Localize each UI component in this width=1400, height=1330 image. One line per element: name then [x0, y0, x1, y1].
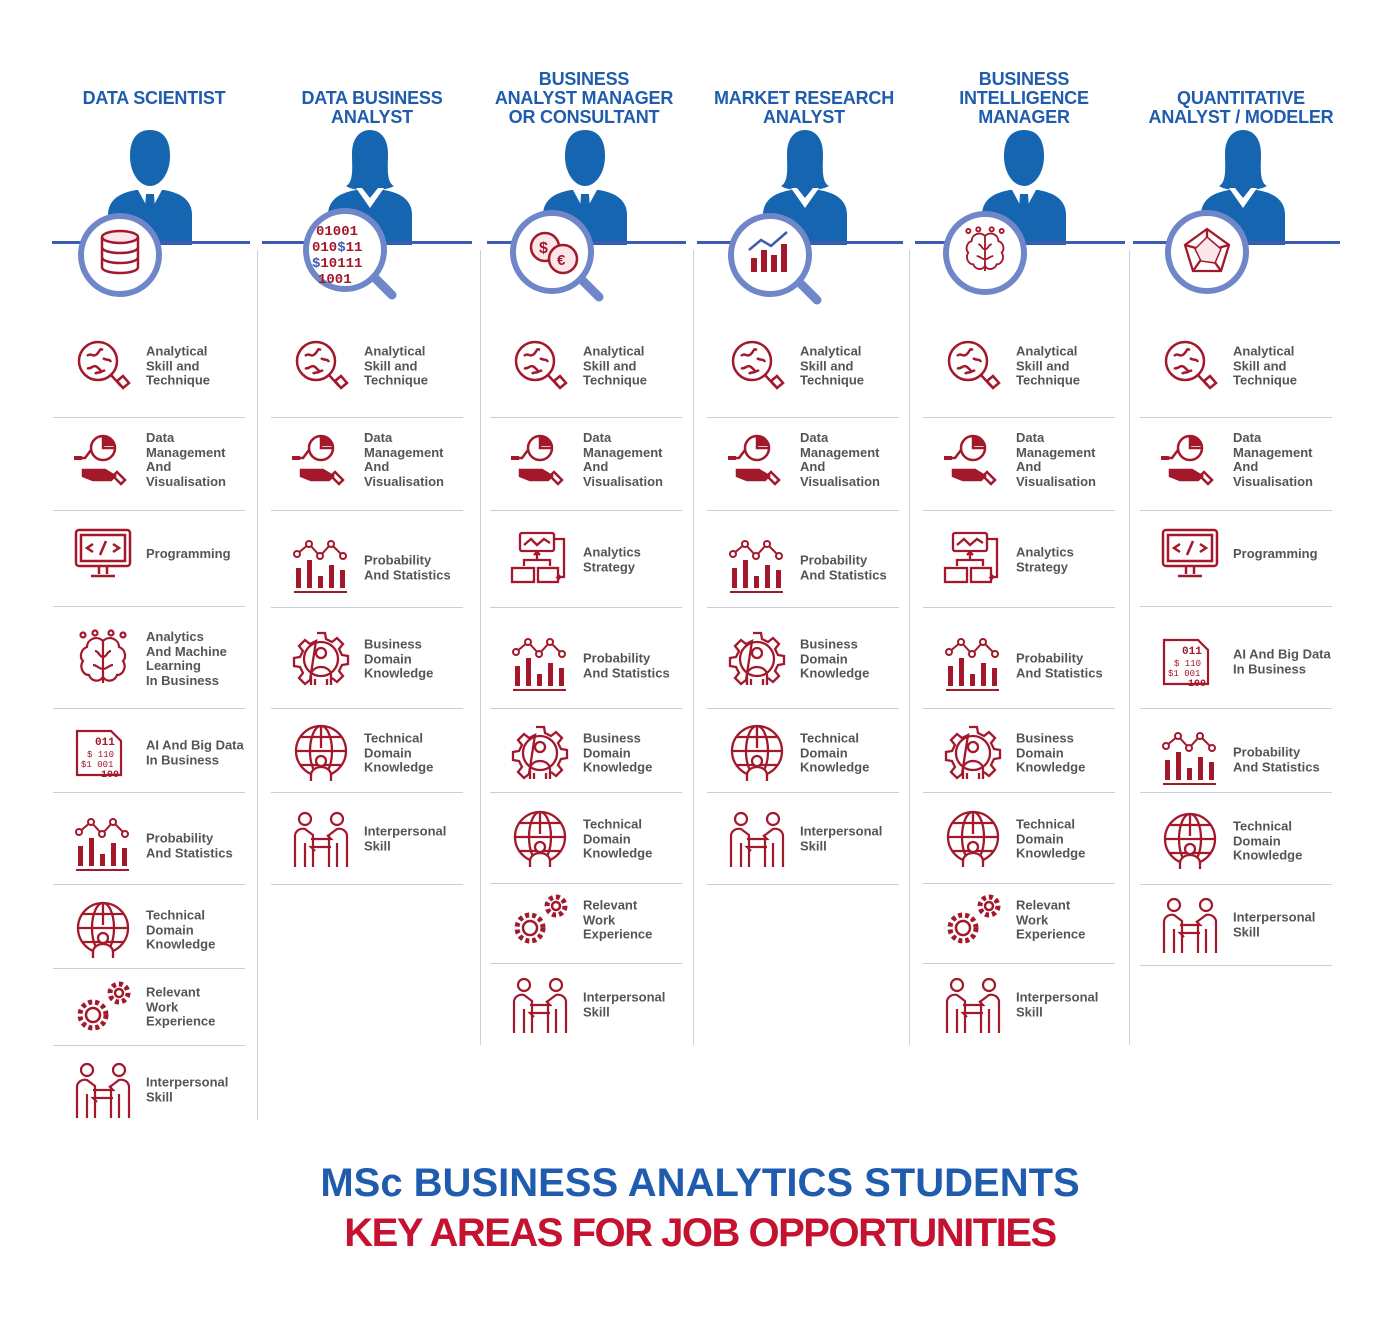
skill: interpersonal — [294, 812, 446, 867]
heading: market research analyst — [714, 88, 894, 127]
skill: data management: Management — [800, 444, 879, 460]
skill: interpersonal: Skill — [583, 1004, 610, 1019]
skill: analytical: Skill and — [1233, 358, 1286, 373]
heading: business intelligence manager: INTELLIGENCE — [959, 88, 1089, 108]
skill: analytical: Analytical — [1016, 343, 1077, 358]
skill: analytical: Analytical — [583, 343, 644, 358]
skill: programming: Programming — [1233, 546, 1318, 561]
skill: technical domain: Knowledge — [364, 759, 433, 774]
person: female 4 — [763, 130, 847, 245]
skill: analytical: Technique — [364, 372, 428, 387]
skill: work experience: Relevant — [1016, 897, 1070, 912]
skill: analytical: Technique — [583, 372, 647, 387]
skill: interpersonal: Interpersonal — [1233, 910, 1315, 924]
skill: technical domain — [1140, 809, 1332, 873]
skill: programming — [74, 528, 231, 578]
skill: data management: Visualisation — [364, 474, 444, 488]
skill: business domain: Knowledge — [583, 759, 652, 774]
heading: market research analyst: MARKET RESEARCH — [714, 88, 894, 108]
skill: business domain — [923, 721, 1115, 785]
person: male 3 — [543, 130, 627, 245]
skill: data management — [1140, 428, 1332, 492]
skill: technical domain: Technical — [1016, 816, 1075, 831]
skill: analytical — [78, 340, 210, 390]
skill: technical domain: Technical — [364, 730, 423, 745]
skill: technical domain: Domain — [583, 831, 631, 846]
skill: data management: Management — [1016, 444, 1095, 460]
skill: analytical: Technique — [1016, 372, 1080, 387]
heading: data business analyst — [301, 88, 443, 127]
icon: binary magnifier: 010$11 — [312, 240, 362, 256]
skill: probability — [923, 634, 1115, 698]
skill: probability: Probability — [1233, 744, 1300, 760]
skill: probability — [293, 540, 451, 593]
icon: currency magnifier — [510, 210, 604, 302]
skill: business domain: Knowledge — [364, 665, 433, 680]
skill: interpersonal — [1140, 893, 1332, 957]
skill: data management: Data — [1016, 430, 1044, 445]
skill: data management: And — [583, 459, 608, 474]
skill: interpersonal: Skill — [146, 1089, 173, 1104]
skill: technical domain — [76, 902, 215, 958]
skill: analytics strategy — [923, 528, 1115, 592]
skill: probability — [707, 536, 899, 600]
skill: data management: Data — [583, 430, 611, 445]
column 5: business intelligence manager skills — [923, 330, 1115, 1030]
skill: technical domain: Knowledge — [1016, 845, 1085, 860]
heading: quantitative analyst: ANALYST / MODELER — [1149, 107, 1333, 127]
skill: technical domain — [490, 807, 682, 871]
skill: technical domain — [923, 807, 1115, 871]
skill: work experience: Experience — [146, 1013, 215, 1028]
person: male 1 — [108, 130, 192, 245]
skill: analytical: Analytical — [364, 343, 425, 358]
column 1: data scientist skills — [53, 340, 245, 1118]
heading: business analyst manager: ANALYST MANAGER — [495, 88, 673, 108]
skill: analytical: Analytical — [800, 343, 861, 358]
skill: data management: And — [800, 459, 825, 474]
skill: business domain: Knowledge — [800, 665, 869, 680]
skill: work experience: Relevant — [146, 984, 200, 999]
column 6: quantitative analyst skills — [1140, 330, 1332, 970]
skill: data management — [923, 428, 1115, 492]
skill: work experience: Experience — [1016, 926, 1085, 941]
icon: brain circle — [943, 211, 1027, 295]
skill: machine learning: In Business — [146, 672, 219, 688]
skill: data management: Data — [364, 430, 392, 445]
skill: interpersonal: Interpersonal — [800, 824, 882, 838]
heading: quantitative analyst: QUANTITATIVE — [1177, 88, 1305, 108]
skill: business domain: Business — [364, 636, 422, 651]
skill: technical domain: Technical — [583, 816, 642, 831]
skill: data management: Management — [146, 444, 225, 460]
skill: technical domain: Domain — [800, 745, 848, 760]
skill: work experience: Work — [583, 912, 615, 927]
skill: business domain: Domain — [800, 651, 848, 666]
heading: business intelligence manager: MANAGER — [978, 107, 1070, 127]
skill: data management: Management — [364, 444, 443, 460]
heading: business analyst manager: OR CONSULTANT — [509, 107, 659, 127]
skill: probability: And Statistics — [583, 665, 670, 680]
skill: interpersonal: Skill — [1233, 924, 1260, 939]
skill: work experience — [490, 888, 682, 952]
skill: data management: Visualisation — [1016, 474, 1096, 488]
skill: machine learning: And Machine — [146, 644, 227, 658]
skill: interpersonal — [923, 973, 1115, 1037]
skill: business domain: Business — [1016, 730, 1074, 745]
skill: probability: And Statistics — [1016, 665, 1103, 680]
icon: database magnifier — [78, 213, 162, 297]
skill: analytical — [707, 334, 899, 398]
skill: data management: Data — [146, 430, 174, 445]
skill: machine learning: Analytics — [146, 629, 204, 644]
skill: analytical: Skill and — [1016, 358, 1069, 373]
heading: data scientist: DATA SCIENTIST — [83, 88, 225, 108]
skill: technical domain: Technical — [1233, 818, 1292, 833]
heading: business intelligence manager: BUSINESS — [979, 69, 1069, 89]
skill: analytical: Technique — [1233, 372, 1297, 387]
skill: analytical — [1140, 334, 1332, 398]
skill: data management: Visualisation — [800, 474, 880, 488]
column 2: data business analyst skills — [271, 340, 463, 885]
skill: data management: And — [1016, 459, 1041, 474]
skill: probability: Probability — [364, 552, 431, 568]
icon: binary magnifier: 1001 — [318, 272, 352, 288]
skill: analytical — [923, 334, 1115, 398]
icon: currency magnifier: $ — [539, 240, 548, 257]
skill: machine learning — [79, 629, 227, 688]
skill: business domain — [707, 627, 899, 691]
skill: data management — [707, 428, 899, 492]
skill: interpersonal: Skill — [800, 838, 827, 853]
skill: technical domain: Domain — [364, 745, 412, 760]
icon: chart magnifier — [728, 213, 822, 304]
skill: technical domain: Technical — [146, 907, 205, 922]
skill: programming — [1140, 522, 1332, 586]
skill: analytical: Analytical — [146, 343, 207, 358]
skill: analytics strategy: Strategy — [1016, 559, 1068, 574]
skill: probability: Probability — [1016, 650, 1083, 666]
skill: work experience: Work — [146, 999, 178, 1014]
skill: ai big data: In Business — [1233, 661, 1306, 676]
skill: probability — [1140, 728, 1332, 792]
icon: currency magnifier: € — [557, 252, 566, 269]
skill: business domain — [292, 632, 433, 686]
skill: interpersonal — [707, 807, 899, 871]
skill: analytical: Technique — [146, 372, 210, 387]
skill: interpersonal: Interpersonal — [583, 990, 665, 1004]
skill: analytical — [514, 340, 647, 390]
skill: data management: And — [364, 459, 389, 474]
skill: business domain: Domain — [364, 651, 412, 666]
skill: probability — [512, 638, 670, 691]
column 3: business analyst manager skills — [490, 340, 682, 1033]
skill: interpersonal: Interpersonal — [146, 1074, 228, 1090]
skill: technical domain: Domain — [1016, 831, 1064, 846]
skill: analytical: Technique — [800, 372, 864, 387]
skill: work experience: Relevant — [583, 897, 637, 912]
skill: probability: Probability — [146, 830, 213, 846]
skill: work experience — [923, 888, 1115, 952]
skill: data management — [511, 430, 663, 488]
skill: probability: Probability — [583, 650, 650, 666]
skill: interpersonal — [76, 1062, 228, 1118]
heading: quantitative analyst — [1149, 88, 1334, 127]
skill: technical domain: Knowledge — [583, 845, 652, 860]
heading: business intelligence manager — [959, 69, 1089, 127]
skill: work experience: Experience — [583, 926, 652, 941]
heading: business analyst manager — [495, 69, 673, 127]
skill: analytics strategy: Analytics — [583, 544, 641, 560]
skill: technical domain: Knowledge — [800, 759, 869, 774]
skill: technical domain: Knowledge — [146, 936, 215, 951]
title: MSc BUSINESS ANALYTICS STUDENTS — [320, 1161, 1080, 1205]
skill: probability: And Statistics — [1233, 759, 1320, 774]
skill: interpersonal: Skill — [364, 838, 391, 853]
skill: probability: And Statistics — [146, 845, 233, 860]
skill: data management: Management — [1233, 444, 1312, 460]
icon: binary magnifier — [303, 208, 396, 300]
skill: analytical: Skill and — [583, 358, 636, 373]
icon: radar pentagon circle — [1165, 210, 1249, 294]
skill: analytics strategy: Analytics — [1016, 544, 1074, 560]
skill: business domain: Domain — [1016, 745, 1064, 760]
person: female 2 — [328, 130, 412, 245]
skill: business domain: Business — [583, 730, 641, 745]
skill: analytical — [296, 340, 428, 390]
skill: interpersonal: Skill — [1016, 1004, 1043, 1019]
title: KEY AREAS FOR JOB OPPORTUNITIES — [344, 1211, 1056, 1255]
skill: data management: Visualisation — [1233, 474, 1313, 488]
skill: data management: Visualisation — [146, 474, 226, 488]
skill: data management: And — [146, 459, 171, 474]
icon: binary magnifier: 01001 — [316, 224, 358, 240]
heading: data business analyst: DATA BUSINESS — [301, 88, 443, 108]
person: female 6 — [1201, 130, 1285, 245]
skill: data management: Data — [800, 430, 828, 445]
skill: work experience — [78, 982, 215, 1030]
skill: interpersonal: Interpersonal — [364, 824, 446, 838]
skill: technical domain: Domain — [146, 922, 194, 937]
icon: binary magnifier: $10111 — [312, 256, 362, 272]
skill: data management — [292, 430, 444, 488]
skill: data management — [74, 430, 226, 488]
heading: data business analyst: ANALYST — [331, 107, 413, 127]
skill: analytical: Skill and — [364, 358, 417, 373]
skill: probability: And Statistics — [364, 567, 451, 582]
skill: interpersonal: Interpersonal — [1016, 990, 1098, 1004]
skill: business domain: Domain — [583, 745, 631, 760]
skill: analytical: Analytical — [1233, 343, 1294, 358]
skill: analytical: Skill and — [146, 358, 199, 373]
heading: market research analyst: ANALYST — [763, 107, 845, 127]
skill: data management: Visualisation — [583, 474, 663, 488]
skill: programming: Programming — [146, 546, 231, 561]
skill: business domain — [512, 726, 652, 780]
skill: ai big data: AI And Big Data — [146, 738, 244, 752]
skill: technical domain — [707, 721, 899, 785]
skill: analytics strategy — [510, 532, 641, 584]
skill: probability: Probability — [800, 552, 867, 568]
skill: probability: And Statistics — [800, 567, 887, 582]
skill: ai big data: In Business — [146, 752, 219, 767]
skill: analytics strategy: Strategy — [583, 559, 635, 574]
skill: probability — [75, 818, 233, 871]
skill: data management: And — [1233, 459, 1258, 474]
skill: business domain: Business — [800, 636, 858, 651]
heading: business analyst manager: BUSINESS — [539, 69, 629, 89]
skill: ai big data: AI And Big Data — [1233, 646, 1331, 662]
skill: machine learning: Learning — [146, 658, 201, 673]
skill: data management: Data — [1233, 430, 1261, 445]
skill: data management: Management — [583, 444, 662, 460]
skill: technical domain: Knowledge — [1233, 847, 1302, 862]
skill: work experience: Work — [1016, 912, 1048, 927]
skill: business domain: Knowledge — [1016, 759, 1085, 774]
skill: analytical: Skill and — [800, 358, 853, 373]
skill: interpersonal — [490, 973, 682, 1037]
skill: ai big data — [76, 730, 244, 777]
person: male 5 — [982, 130, 1066, 245]
column 4: market research analyst skills — [707, 330, 899, 890]
skill: technical domain: Domain — [1233, 833, 1281, 848]
skill: technical domain — [294, 724, 433, 781]
title — [0, 1158, 1400, 1258]
skill: ai big data — [1140, 630, 1332, 694]
skill: technical domain: Technical — [800, 730, 859, 745]
